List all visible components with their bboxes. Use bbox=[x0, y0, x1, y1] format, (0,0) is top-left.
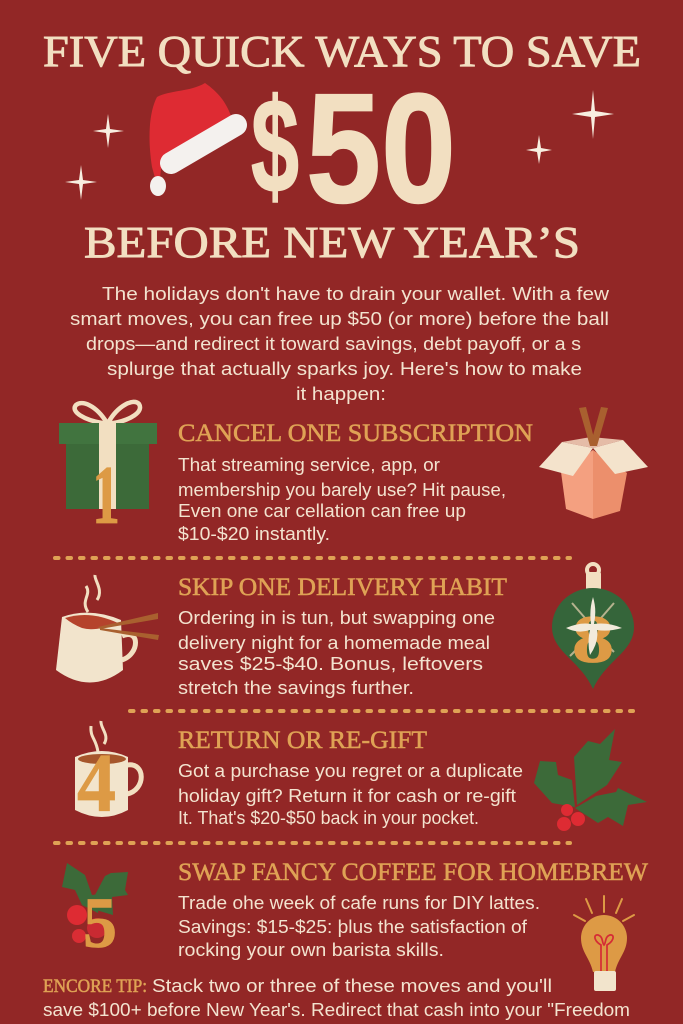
big amount: $ bbox=[251, 72, 299, 221]
intro paragraph: The holidays don't have to drain your wallet. With a few bbox=[102, 283, 610, 304]
title line 1: FIVE QUICK WAYS TO SAVE bbox=[43, 27, 641, 76]
section 3 text: holiday gift? Return it for cash or re-gift bbox=[178, 785, 516, 806]
icon: santa hat bbox=[150, 83, 236, 196]
icon: light bulb bbox=[574, 896, 634, 991]
section 2 text bbox=[178, 607, 495, 698]
encore tip bbox=[43, 975, 630, 1020]
icon: holly with number 5 bbox=[62, 863, 128, 963]
section 2 text: Ordering in is tun, but swapping one bbox=[178, 607, 495, 628]
big amount: 50 bbox=[306, 62, 456, 236]
intro paragraph bbox=[70, 283, 610, 404]
section 2 text: saves $25-$40. Bonus, leftovers bbox=[178, 653, 483, 674]
section 1 text: That streaming service, app, or bbox=[178, 454, 440, 475]
icon: takeout box bbox=[539, 407, 648, 519]
intro paragraph: splurge that actually sparks joy. Here's how to make bbox=[107, 358, 582, 379]
icon: holly with number 5: 5 bbox=[83, 883, 117, 963]
section 3 heading: RETURN OR RE-GIFT bbox=[178, 727, 427, 754]
icon: gift box with number 1: 1 bbox=[92, 449, 120, 542]
section 4 text: rocking your own barista skills. bbox=[178, 939, 444, 960]
divider bbox=[55, 556, 570, 560]
icon: gift box with number 1 bbox=[59, 402, 157, 542]
sparkles bbox=[65, 90, 614, 200]
encore tip: ENCORE TIP: bbox=[43, 976, 147, 997]
icon: holly bbox=[534, 729, 647, 831]
section 1 text: membership you barely use? Hit pause, bbox=[178, 479, 506, 500]
section 4 text bbox=[178, 892, 540, 960]
divider bbox=[130, 709, 633, 713]
encore tip: Stack two or three of these moves and you'll bbox=[152, 975, 552, 996]
section 2 heading: SKIP ONE DELIVERY HABIT bbox=[178, 574, 507, 601]
intro paragraph: smart moves, you can free up $50 (or more) before the ball bbox=[70, 308, 609, 329]
section 3 text bbox=[178, 760, 523, 828]
title line 2: BEFORE NEW YEAR’S bbox=[84, 218, 580, 267]
section 4 heading: SWAP FANCY COFFEE FOR HOMEBREW bbox=[178, 859, 648, 886]
encore tip: save $100+ before New Year's. Redirect that cash into your "Freedom bbox=[43, 999, 630, 1020]
icon: ornament with number 8: 8 bbox=[572, 601, 614, 677]
section 3 text: Got a purchase you regret or a duplicate bbox=[178, 760, 523, 781]
section 4 text: Savings: $15-$25: þlus the satisfaction of bbox=[178, 916, 528, 937]
section 2 text: delivery night for a homemade meal bbox=[178, 632, 490, 653]
section 1 text: Even one car cellation can free up bbox=[178, 500, 466, 521]
section 4 text: Trade ohe week of cafe runs for DIY lattes. bbox=[178, 892, 540, 913]
section 1 text: $10-$20 instantly. bbox=[178, 523, 330, 544]
section 1 heading: CANCEL ONE SUBSCRIPTION bbox=[178, 420, 533, 447]
big amount bbox=[251, 62, 456, 236]
section 3 text: It. That's $20-$50 back in your pocket. bbox=[178, 807, 479, 828]
section 1 text bbox=[178, 454, 506, 544]
intro paragraph: drops—and redirect it toward savings, debt payoff, or a s bbox=[86, 333, 581, 354]
icon: ornament with number 8 bbox=[552, 564, 634, 689]
icon: mug with number 4 bbox=[75, 721, 141, 830]
icon: mug with number 4: 4 bbox=[77, 737, 116, 830]
divider bbox=[55, 841, 570, 845]
intro paragraph: it happen: bbox=[296, 383, 386, 404]
icon: coffee cup with chopsticks bbox=[56, 575, 159, 682]
section 2 text: stretch the savings further. bbox=[178, 677, 414, 698]
